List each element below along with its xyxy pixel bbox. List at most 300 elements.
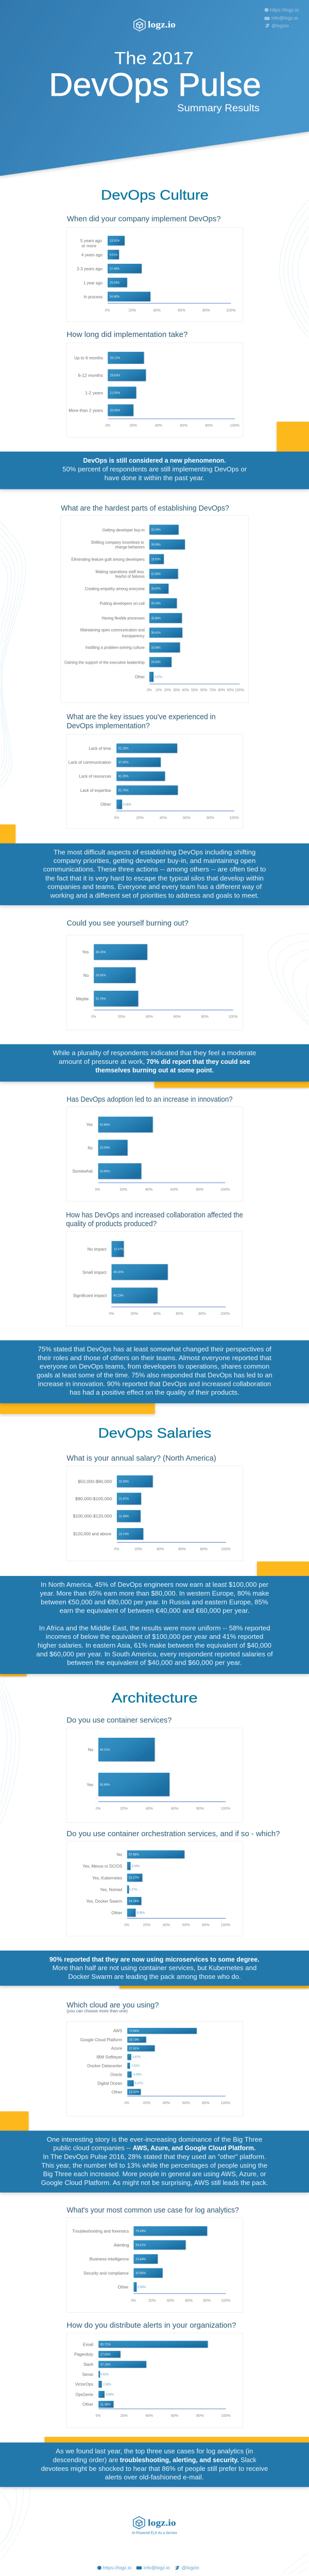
bar: Yes xyxy=(86,1116,153,1132)
banner background xyxy=(0,843,309,905)
bar: Small impact xyxy=(82,1264,168,1280)
x axis: 100% xyxy=(221,1806,230,1810)
bar: Other xyxy=(100,800,131,809)
x axis: 40% xyxy=(166,2298,174,2302)
bar: Yes, Nomad: 1.37% xyxy=(129,1888,138,1891)
x axis: 60% xyxy=(178,1547,186,1551)
banner text: increase in innovation. 90% reported that DevOps and increased collaboration xyxy=(38,1380,271,1387)
bar: Gaining executive support: 24.03% xyxy=(151,660,161,664)
bar: 6-12 months: 6-12 months xyxy=(78,373,104,378)
bar: Digital Ocean xyxy=(97,2080,143,2086)
x axis: 60% xyxy=(173,1014,181,1019)
bar: Yes, Nomad: Yes, Nomad xyxy=(100,1887,122,1892)
bar: No xyxy=(88,1140,128,1156)
bar: $100,000-$120,000: $100,000-$120,000 xyxy=(73,1514,112,1519)
x axis: 20% xyxy=(129,308,136,312)
x axis: 20% xyxy=(119,1187,127,1192)
banner background xyxy=(0,1951,309,1986)
bar: 1-2 years: 1-2 years xyxy=(85,391,104,395)
x axis: 60% xyxy=(171,2413,178,2418)
bar: More than 2 years xyxy=(68,404,133,416)
banner text: In Africa and the Middle East, the results were more uniform -- 58% reported xyxy=(39,1624,270,1632)
bar: Other: 8.08% xyxy=(137,1911,145,1915)
panel frame xyxy=(67,935,243,1030)
chart title: container orchestration: Do you use container orchestration services, and if so - which? xyxy=(66,1829,280,1838)
panel frame xyxy=(67,2022,243,2116)
bar: Instilling a problem-solving culture: Instilling a problem-solving culture xyxy=(85,645,145,650)
x axis: 0% xyxy=(105,423,110,428)
bar: Instilling a problem-solving culture xyxy=(85,642,180,652)
bar: Pagerduty: 17.03% xyxy=(100,2353,111,2357)
bar: Yes, Kubernetes: Yes, Kubernetes xyxy=(92,1875,123,1880)
chart title: hardest parts: What are the hardest parts of establishing DevOps? xyxy=(61,504,229,513)
bar: Gaining executive support: Gaining the support of the executive leadership xyxy=(64,660,145,665)
bar: Troubleshooting and forensics: 79.49% xyxy=(135,2230,146,2233)
bar: Instilling a problem-solving culture: 33.58% xyxy=(151,646,161,650)
banner text: descending order) are xyxy=(53,2456,118,2464)
bar: Lack of communication: 37.30% xyxy=(118,761,129,765)
bar: Yes, Kubernetes: 15.27% xyxy=(129,1876,139,1880)
bar: Other: Other xyxy=(100,802,111,807)
bar: No impact: 10.47% xyxy=(114,1248,124,1251)
bar: $80,000-$100,000: $80,000-$100,000 xyxy=(75,1497,112,1501)
banner text: DevOps is still considered a new phenomenon. xyxy=(83,456,226,464)
bar: Business intelligence: 25.64% xyxy=(135,2258,146,2261)
x axis xyxy=(124,1918,230,1927)
x axis: 0% xyxy=(124,2100,129,2105)
x axis: 80% xyxy=(202,308,210,312)
banner text: More than half are not using container services, but Kubernetes and xyxy=(53,1964,256,1972)
icon: twitter xyxy=(265,24,270,27)
chart title: key issues: DevOps implementation? xyxy=(66,722,150,731)
x axis: 100% xyxy=(228,1014,238,1019)
x axis: 30% xyxy=(173,688,180,692)
chart title: cloud usage xyxy=(66,2001,159,2013)
bar: 1 year ago: 15.54% xyxy=(110,281,120,284)
website: https://logz.io xyxy=(270,8,299,13)
bar: More than 2 years: More than 2 years xyxy=(68,408,104,413)
banner text: AWS, Azure, and Google Cloud Platform. xyxy=(133,2144,255,2152)
bar: Small impact: Small impact xyxy=(82,1270,107,1275)
panel frame xyxy=(67,227,243,321)
bar: Other: Other xyxy=(111,1910,122,1915)
bar: OpsGenie xyxy=(76,2391,114,2398)
bar: 5 years ago or more: 13.51% xyxy=(110,239,120,243)
x axis: 80% xyxy=(203,2298,211,2302)
website: https://logz.io xyxy=(103,2565,131,2571)
x axis: 20% xyxy=(136,816,144,820)
banner background xyxy=(0,2131,309,2193)
bar: $80,000-$100,000: 21.97% xyxy=(119,1497,129,1501)
bar: Lack of time: Lack of time xyxy=(89,746,111,751)
bar: OpsGenie: OpsGenie xyxy=(76,2392,93,2397)
twitter handle: @logzio xyxy=(271,23,289,29)
x axis: 20% xyxy=(117,1014,125,1019)
bar: Lack of communication xyxy=(68,757,161,767)
bar: VictorOps: VictorOps xyxy=(75,2382,94,2386)
banner text: higher salaries. In eastern Asia, 61% make between the equivalent of $40,000 xyxy=(38,1641,271,1649)
icon: logz.io logo xyxy=(134,19,145,31)
bar: Azure xyxy=(111,2045,154,2052)
x axis: 80% xyxy=(196,2413,204,2418)
bar: Other: Other xyxy=(112,2090,122,2094)
chart title: innovation: Has DevOps adoption led to an increase in innovation? xyxy=(66,1095,233,1104)
x axis: 80% xyxy=(201,1014,209,1019)
banner: difficult aspects xyxy=(0,843,309,905)
bar: Email: 85.71% xyxy=(100,2343,111,2346)
bar: Up to 6 months: 28.12% xyxy=(110,357,121,360)
panel: innovation chart xyxy=(67,1107,243,1201)
bar: No: 29.95% xyxy=(96,974,106,977)
bar: Eliminating feature guilt: 15.53% xyxy=(151,557,161,561)
bar: Yes, Mesos or DC/OS: Yes, Mesos or DC/OS xyxy=(82,1863,122,1869)
bar: No impact xyxy=(88,1241,124,1257)
bar: 6-12 months xyxy=(78,369,146,381)
logo wordmark: logz.io xyxy=(148,20,176,29)
banner background xyxy=(0,452,309,489)
bar: $120,000 and above: 23.74% xyxy=(119,1533,129,1536)
banner text: The most difficult aspects of establishing DevOps including shifting xyxy=(54,849,255,856)
bar: Docker Datacenter: Docker Datacenter xyxy=(88,2063,122,2069)
banner text: In North America, 45% of DevOps engineers now earn at least $100,000 per xyxy=(41,1581,269,1588)
bar: Oracle xyxy=(110,2072,142,2077)
banner: Big Three clouds xyxy=(0,2131,309,2193)
banner text: incomes of below the equivalent of $100,000 per year and 41% reported xyxy=(46,1633,263,1640)
bar: $50,000-$80,000: $50,000-$80,000 xyxy=(78,1479,112,1484)
panel: container services chart xyxy=(67,1728,243,1823)
x axis: 40% xyxy=(145,1806,153,1810)
bar: 1 year ago xyxy=(83,278,127,287)
bar: 1 year ago: 1 year ago xyxy=(83,280,102,285)
bar: Making operations staff less fearful: fearful of failures xyxy=(115,574,145,579)
x axis: 80% xyxy=(205,423,213,428)
panel: implementation date chart xyxy=(67,227,243,321)
panel: hardest parts chart xyxy=(61,515,249,703)
bar: $100,000-$120,000: 21.46% xyxy=(119,1515,129,1518)
banner text: As we found last year, the top three use cases for log analytics (in xyxy=(56,2448,253,2455)
x axis: 0% xyxy=(124,1923,129,1927)
x axis: 100% xyxy=(221,1923,230,1927)
bar: Shifting company incentives: Shifting company incentives to xyxy=(91,540,144,545)
yellow accent block xyxy=(0,824,15,843)
banner text: devotees might be shocked to hear that 86% of people still prefer to receive xyxy=(41,2465,268,2472)
panel: burnout chart xyxy=(67,935,243,1030)
panel frame xyxy=(67,1466,243,1561)
bar: Up to 6 months: Up to 6 months xyxy=(74,355,104,361)
banner text: 75% stated that DevOps has at least somewhat changed their perspectives of xyxy=(38,1345,271,1353)
banner: log analytics findings xyxy=(0,2443,309,2487)
banner text xyxy=(53,1049,256,1074)
bar: Slack: Slack xyxy=(83,2362,94,2367)
bar: Yes: 38.29% xyxy=(96,951,106,954)
bar: 1-2 years xyxy=(85,387,136,399)
bar: Other xyxy=(112,2089,141,2095)
banner: new phenomenon xyxy=(0,452,309,489)
bar: Azure: Azure xyxy=(111,2046,122,2051)
bar: Troubleshooting and forensics: Troubleshooting and forensics xyxy=(72,2229,129,2233)
x axis: 60% xyxy=(183,816,191,820)
bar: Pagerduty xyxy=(74,2351,121,2358)
x axis: 100% xyxy=(221,2298,230,2302)
bar: $120,000 and above xyxy=(73,1528,143,1539)
x axis: 80% xyxy=(196,1187,203,1192)
bar: No: 23.09% xyxy=(100,1146,110,1150)
bar: Slack: 37.18% xyxy=(100,2363,111,2366)
bar: No xyxy=(88,1738,154,1761)
banner text: Google Cloud Platform. As might not be surprising, AWS still leads the pack. xyxy=(41,2179,268,2187)
bar: No: 57.98% xyxy=(129,1853,139,1856)
banner text: between €50,000 and €80,000 per year. In Russia and eastern Europe, 85% xyxy=(41,1598,268,1606)
banner text: 90% reported that they are now using microservices to some degree. xyxy=(49,1956,260,1963)
x axis xyxy=(91,1010,238,1019)
banner text: working and a different set of priorities to address and goals to meet. xyxy=(50,892,259,899)
bar: Docker Datacenter xyxy=(88,2063,140,2069)
x axis: 10% xyxy=(155,688,162,692)
x axis: 70% xyxy=(209,688,216,692)
banner text: company priorities, getting developer buy-in, and maintaining open xyxy=(54,857,255,865)
bar: Gaining executive support xyxy=(64,657,171,667)
panel frame xyxy=(66,1231,242,1326)
bar: Small impact: 49.30% xyxy=(113,1270,124,1274)
x axis: 40% xyxy=(145,2413,153,2418)
bar: Yes: 42.96% xyxy=(100,1123,110,1127)
bar: Other xyxy=(82,2401,113,2408)
banner text: One interesting story is the ever-increasing dominance of the Big Three xyxy=(47,2136,262,2143)
chart title: implementation date: When did your company implement DevOps? xyxy=(67,215,221,224)
banner text xyxy=(37,1345,272,1396)
panel: product quality chart xyxy=(66,1231,242,1326)
x axis: 20% xyxy=(134,1547,142,1551)
bar: Security and compliance: 30.95% xyxy=(135,2272,146,2275)
bar: Putting developers on-call: 30.18% xyxy=(151,602,161,605)
bar: No: No xyxy=(117,1852,122,1857)
bar: Alerting: 56.41% xyxy=(135,2244,146,2247)
bar: 5 years ago or more xyxy=(80,236,125,248)
bar: 2-3 years ago: 2-3 years ago xyxy=(77,266,102,271)
banner text: Docker Swarm are leading the pack among those who do. xyxy=(68,1973,241,1980)
x axis: 90% xyxy=(227,688,234,692)
bar: Google Cloud Platform xyxy=(80,2037,146,2043)
x axis: 20% xyxy=(164,688,171,692)
email: info@logz.io xyxy=(144,2565,170,2571)
bar: Yes: 55.89% xyxy=(100,1783,110,1787)
bar: Pagerduty: Pagerduty xyxy=(74,2352,94,2357)
bar: Making operations staff less fearful xyxy=(95,569,178,579)
banner text: public cloud companies -- xyxy=(53,2144,131,2152)
bar: Shifting company incentives: change behaviors xyxy=(115,545,145,550)
bar: Lack of resources: Lack of resources xyxy=(79,774,111,779)
icon: globe xyxy=(97,2566,101,2570)
bar: Having flexible processes xyxy=(102,613,182,623)
bar: Lack of resources: 41.26% xyxy=(118,775,129,778)
x axis: 0% xyxy=(114,816,119,820)
banner text: between the equivalent of $40,000 and $60,000 per year. xyxy=(67,1659,242,1667)
bar: Having flexible processes: Having flexible processes xyxy=(102,616,145,620)
panel frame xyxy=(67,2333,243,2428)
bar: Lack of expertise xyxy=(80,786,178,795)
bar: Getting developer buy-in xyxy=(102,524,179,535)
x axis xyxy=(114,1543,230,1551)
bar: 6-12 months: 29.83% xyxy=(110,374,121,377)
x axis: 100% xyxy=(220,1311,230,1316)
x axis: 20% xyxy=(129,423,137,428)
bar: Google Cloud Platform: Google Cloud Platform xyxy=(80,2037,122,2042)
bar: Email xyxy=(83,2341,208,2348)
bar: Alerting xyxy=(114,2240,185,2249)
email: info@logz.io xyxy=(271,15,298,21)
bar: Security and compliance xyxy=(83,2268,163,2278)
x axis: 60% xyxy=(180,423,187,428)
x axis: 100% xyxy=(221,1547,230,1551)
bar: Creating empathy: 20.87% xyxy=(151,587,161,591)
banner text: This year, the number fell to 13% while the percentages of people using the xyxy=(41,2162,267,2169)
x axis: 0% xyxy=(95,1187,100,1192)
banner text: the fact that it is very hard to escape the typical silos that develop within xyxy=(45,874,264,882)
bar: Azure: 27.61% xyxy=(129,2047,140,2050)
x axis: 80% xyxy=(202,1923,210,1927)
bar: Other: Other xyxy=(117,2284,129,2290)
bar: Troubleshooting and forensics xyxy=(72,2226,207,2236)
bar: Business intelligence xyxy=(90,2254,158,2264)
x axis: 0% xyxy=(109,1311,114,1316)
bar: Yes, Docker Swarm: 14.26% xyxy=(129,1900,139,1903)
yellow accent block xyxy=(154,1079,309,1088)
banner text: and $60,000 per year. In South America, every respondent reported salaries of xyxy=(36,1650,273,1658)
header gradient background xyxy=(0,0,309,176)
bar: Maybe: 31.76% xyxy=(96,997,106,1001)
bar: $100,000-$120,000 xyxy=(73,1510,141,1522)
chart title: cloud usage: Which cloud are you using? xyxy=(66,2001,159,2009)
banner: microservices xyxy=(0,1951,309,1986)
x axis: 20% xyxy=(120,1806,128,1810)
x axis: 40% xyxy=(153,308,161,312)
x axis: 20% xyxy=(143,2100,150,2105)
bar: Lack of expertise: Lack of expertise xyxy=(80,788,111,793)
panel frame xyxy=(67,1841,243,1936)
x axis: 40% xyxy=(157,1547,164,1551)
chart title: product quality: quality of products produced? xyxy=(66,1220,157,1228)
bar: Sense: Sense xyxy=(82,2372,93,2377)
bar: Significant impact xyxy=(73,1287,158,1303)
x axis: 40% xyxy=(163,2100,170,2105)
panel: log analytics chart xyxy=(67,2217,243,2313)
x axis: 80% xyxy=(202,2100,210,2105)
footer contact links xyxy=(97,2565,199,2571)
bar: Somewhat xyxy=(72,1163,141,1179)
banner text: goals at least some of the time. 75% also responded that DevOps has led to an xyxy=(37,1371,272,1379)
x axis: 20% xyxy=(148,2298,156,2302)
heading: DevOps Culture: DevOps Culture xyxy=(101,187,209,202)
bar: $50,000-$80,000: 32.83% xyxy=(119,1480,129,1483)
bar: $80,000-$100,000 xyxy=(75,1493,141,1504)
bar: Eliminating feature guilt xyxy=(71,554,164,564)
contact links xyxy=(265,8,299,29)
x axis: 100% xyxy=(229,816,239,820)
bar: Sense: 0.92% xyxy=(100,2373,109,2376)
bar: Lack of resources xyxy=(79,771,165,781)
bar: 5 years ago or more: 5 years ago xyxy=(80,238,102,243)
x axis: 40% xyxy=(153,1311,161,1316)
bar: No: 44.11% xyxy=(100,1748,110,1752)
x axis: 100% xyxy=(221,2413,230,2418)
x axis xyxy=(131,2294,230,2302)
x axis xyxy=(109,1307,230,1316)
yellow accent block xyxy=(44,2437,309,2443)
x axis: 40% xyxy=(182,688,189,692)
bar: Other: 2.93% xyxy=(138,2285,146,2289)
bar: Yes, Mesos or DC/OS xyxy=(82,1862,140,1870)
chart title: alert distribution: How do you distribute alerts in your organization? xyxy=(66,2321,236,2330)
bar: AWS xyxy=(113,2028,197,2034)
panel frame xyxy=(61,515,249,703)
banner text: alerts over old-fashioned e-mail. xyxy=(105,2473,204,2481)
bar: Putting developers on-call xyxy=(100,598,177,608)
bar: No xyxy=(83,967,135,983)
x axis: 100% xyxy=(230,423,239,428)
bar: Shifting company incentives xyxy=(91,539,185,550)
bar: Getting developer buy-in: 32.04% xyxy=(151,528,161,532)
bar: 4 years ago: 9.01% xyxy=(110,253,118,257)
panel: implementation duration chart xyxy=(67,343,243,437)
bar: Oracle: 4.05% xyxy=(133,2073,142,2077)
banner text: communications. These three actions -- among others -- are often tied to xyxy=(43,866,266,873)
x axis: 80% xyxy=(200,1547,208,1551)
bar: Somewhat: Somewhat xyxy=(72,1168,93,1174)
icon: twitter xyxy=(175,2566,179,2570)
banner text: amount of pressure at work, xyxy=(59,1058,145,1065)
bar: Putting developers on-call: Putting developers on-call xyxy=(100,601,145,606)
bar: IBM Softlayer: IBM Softlayer xyxy=(97,2055,122,2059)
title line: Summary Results: Summary Results xyxy=(177,103,260,114)
x axis: 40% xyxy=(163,1923,170,1927)
icon: logz.io logo xyxy=(133,2517,145,2529)
x axis xyxy=(105,303,236,312)
x axis: 50% xyxy=(191,688,198,692)
bar: Maintaining open communication: transparency xyxy=(122,633,145,638)
banner text: In The DevOps Pulse 2016, 28% stated that they used an "other" platform. xyxy=(43,2153,266,2160)
bar: Maybe xyxy=(76,991,138,1007)
bar: Alerting: Alerting xyxy=(114,2243,129,2248)
title line: DevOps Pulse: DevOps Pulse xyxy=(49,66,261,103)
x axis: 80% xyxy=(207,816,214,820)
icon: envelope xyxy=(265,17,270,20)
bar: Making operations staff less fearful: 31.55% xyxy=(151,572,161,576)
bar: Significant impact: 40.23% xyxy=(113,1294,124,1298)
banner background xyxy=(0,2443,309,2487)
bar: Yes: Yes xyxy=(86,1122,93,1127)
chart title: log analytics use case: What's your most common use case for log analytics? xyxy=(66,2206,239,2215)
bar: Other: Other xyxy=(135,674,145,680)
header band xyxy=(0,0,309,176)
icon: globe xyxy=(265,8,269,12)
x axis xyxy=(95,1183,230,1192)
banner text xyxy=(62,456,247,482)
bar: Yes xyxy=(87,1773,169,1796)
panel frame xyxy=(67,1728,243,1823)
bar: Other: 4.37% xyxy=(154,675,162,679)
banner background xyxy=(0,1044,309,1081)
bar: Other: 4.66% xyxy=(123,803,131,806)
bar: Maybe: Maybe xyxy=(76,996,89,1001)
x axis: 100% xyxy=(235,688,244,692)
x axis: 60% xyxy=(185,2298,193,2302)
banner text xyxy=(49,1956,260,1980)
bar: 2-3 years ago: 27.48% xyxy=(110,267,120,270)
panel: alert distribution chart xyxy=(67,2333,243,2428)
bar: Eliminating feature guilt: Eliminating feature guilt among developers xyxy=(71,557,145,562)
bar: Lack of time: 51.28% xyxy=(118,747,129,750)
bar: Maintaining open communication: 36.41% xyxy=(151,631,161,635)
